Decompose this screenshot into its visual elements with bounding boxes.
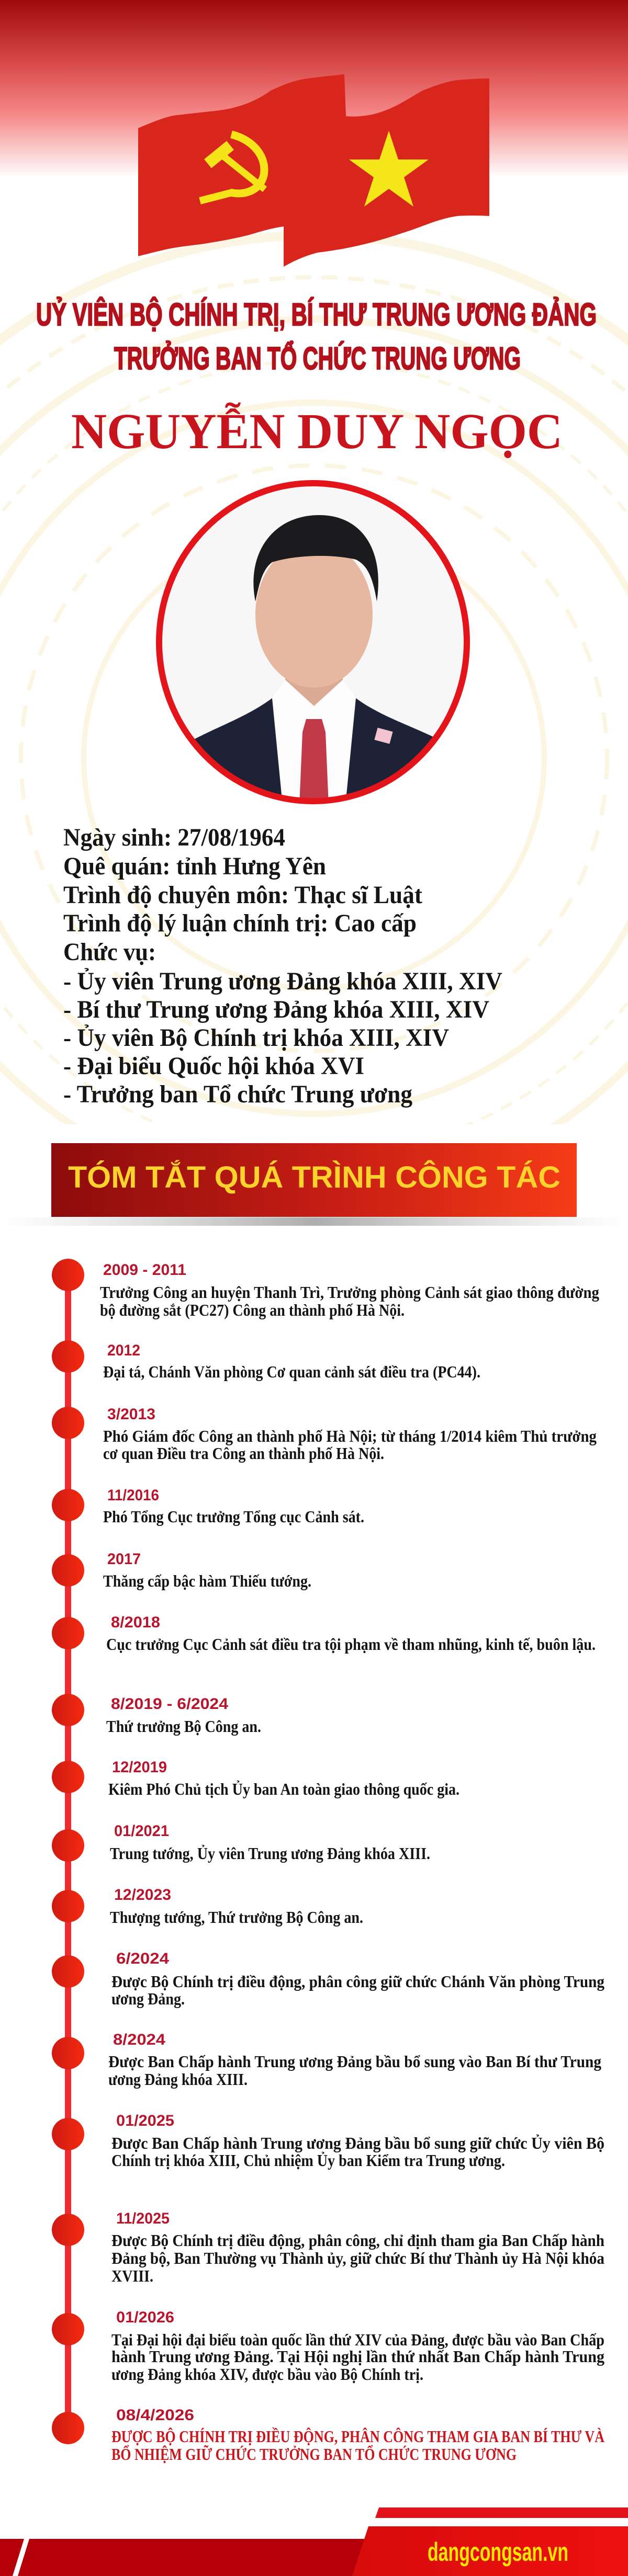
entry 11/2025	[52, 2210, 604, 2285]
entry 2009-2011: 2009 - 2011	[103, 1261, 186, 1279]
entry 01/2026: 01/2026	[116, 2309, 174, 2326]
entry 01/2025: Chính trị khóa XIII, Chủ nhiệm Ủy ban Kiểm tra Trung ương.	[111, 2151, 505, 2170]
entry 11/2016: Phó Tổng Cục trưởng Tổng cục Cảnh sát.	[103, 1507, 364, 1526]
entry 8/2019 - 6/2024: 8/2019 - 6/2024	[111, 1695, 228, 1713]
entry 12/2023: 12/2023	[114, 1886, 171, 1903]
entry 11/2025: 11/2025	[116, 2210, 170, 2227]
entry 12/2019: 12/2019	[112, 1759, 167, 1776]
biography text block: - Bí thư Trung ương Đảng khóa XIII, XIV	[63, 996, 489, 1023]
portrait photo	[157, 481, 471, 805]
entry 8/2018	[52, 1614, 596, 1654]
entry 6/2024: 6/2024	[116, 1950, 169, 1967]
entry 3/2013: 3/2013	[107, 1406, 155, 1423]
entry 6/2024: ương Đảng.	[111, 1989, 185, 2008]
section banner	[0, 1143, 628, 1226]
entry 2009-2011	[52, 1259, 599, 1319]
entry 8/2019 - 6/2024	[52, 1694, 261, 1736]
entry 2012: Đại tá, Chánh Văn phòng Cơ quan cảnh sát điều tra (PC44).	[103, 1362, 480, 1381]
biography text block: Quê quán: tỉnh Hưng Yên	[63, 852, 326, 880]
entry 11/2025: XVIII.	[111, 2266, 153, 2285]
entry 01/2025: 01/2025	[116, 2112, 174, 2129]
timeline axis	[65, 1260, 71, 2428]
entry 12/2019: Kiêm Phó Chủ tịch Ủy ban An toàn giao thông quốc gia.	[108, 1780, 459, 1798]
entry 12/2023	[52, 1886, 363, 1927]
entry 8/2019 - 6/2024: Thứ trưởng Bộ Công an.	[106, 1717, 261, 1736]
entry 8/2024	[52, 2031, 601, 2089]
icon: hammer and sickle	[200, 134, 265, 201]
timeline entries	[52, 1259, 604, 2464]
entry 01/2021	[52, 1822, 430, 1863]
entry 12/2023: Thượng tướng, Thứ trưởng Bộ Công an.	[110, 1908, 363, 1927]
biography text block: Ngày sinh: 27/08/1964	[63, 824, 285, 851]
biography text block	[63, 824, 502, 1108]
icon: star	[349, 131, 429, 207]
entry 11/2016: 11/2016	[107, 1487, 159, 1504]
entry 08/4/2026	[52, 2407, 604, 2464]
footer band	[0, 2507, 628, 2576]
entry 8/2024: 8/2024	[113, 2031, 165, 2048]
section banner: TÓM TẮT QUÁ TRÌNH CÔNG TÁC	[68, 1160, 560, 1194]
biography text block: Trình độ chuyên môn: Thạc sĩ Luật	[63, 881, 422, 909]
entry 2017	[52, 1551, 311, 1590]
entry 2009-2011: bộ đường sắt (PC27) Công an thành phố Hà Nội.	[100, 1301, 405, 1319]
biography text block: - Ủy viên Trung ương Đảng khóa XIII, XIV	[63, 967, 502, 995]
entry 11/2016	[52, 1487, 364, 1526]
biography text block: - Ủy viên Bộ Chính trị khóa XIII, XIV	[63, 1024, 449, 1052]
entry 08/4/2026: 08/4/2026	[116, 2407, 194, 2424]
entry 01/2026: ương Đảng khóa XIV, được bầu vào Bộ Chính trị.	[111, 2365, 423, 2384]
entry 08/4/2026: BỔ NHIỆM GIỮ CHỨC TRƯỞNG BAN TỔ CHỨC TRUNG ƯƠNG	[111, 2445, 517, 2464]
biography text block: Trình độ lý luận chính trị: Cao cấp	[63, 909, 417, 937]
entry 3/2013: cơ quan Điều tra Công an thành phố Hà Nội.	[103, 1444, 384, 1463]
entry 8/2018: 8/2018	[111, 1614, 160, 1631]
entry 01/2026	[52, 2309, 604, 2384]
title	[36, 297, 597, 376]
entry 01/2021: Trung tướng, Ủy viên Trung ương Đảng khóa XIII.	[110, 1844, 430, 1863]
entry 01/2025	[52, 2112, 604, 2170]
entry 01/2021: 01/2021	[114, 1822, 169, 1840]
entry 2017: Thăng cấp bậc hàm Thiếu tướng.	[103, 1571, 311, 1590]
biography text block: - Trưởng ban Tổ chức Trung ương	[63, 1080, 412, 1108]
entry 6/2024	[52, 1950, 604, 2008]
entry 12/2019	[52, 1759, 459, 1798]
biography text block: Chức vụ:	[63, 938, 156, 966]
entry 2012	[52, 1340, 480, 1381]
entry 2017: 2017	[107, 1551, 141, 1568]
flags logo	[138, 74, 489, 267]
name heading: NGUYỄN DUY NGỌC	[71, 403, 563, 459]
decorative drum pattern background	[0, 235, 628, 1281]
biography text block: - Đại biểu Quốc hội khóa XVI	[63, 1052, 364, 1080]
entry 8/2024: ương Đảng khóa XIII.	[108, 2070, 248, 2089]
entry 01/2025: Được Ban Chấp hành Trung ương Đảng bầu bổ sung giữ chức Ủy viên Bộ	[111, 2134, 604, 2152]
entry 3/2013	[52, 1406, 597, 1463]
header gradient background	[0, 0, 628, 178]
entry 01/2026: hành Trung ương Đảng. Tại Hội nghị lần thứ nhất Ban Chấp hành Trung	[111, 2347, 604, 2366]
entry 2012: 2012	[107, 1342, 140, 1359]
